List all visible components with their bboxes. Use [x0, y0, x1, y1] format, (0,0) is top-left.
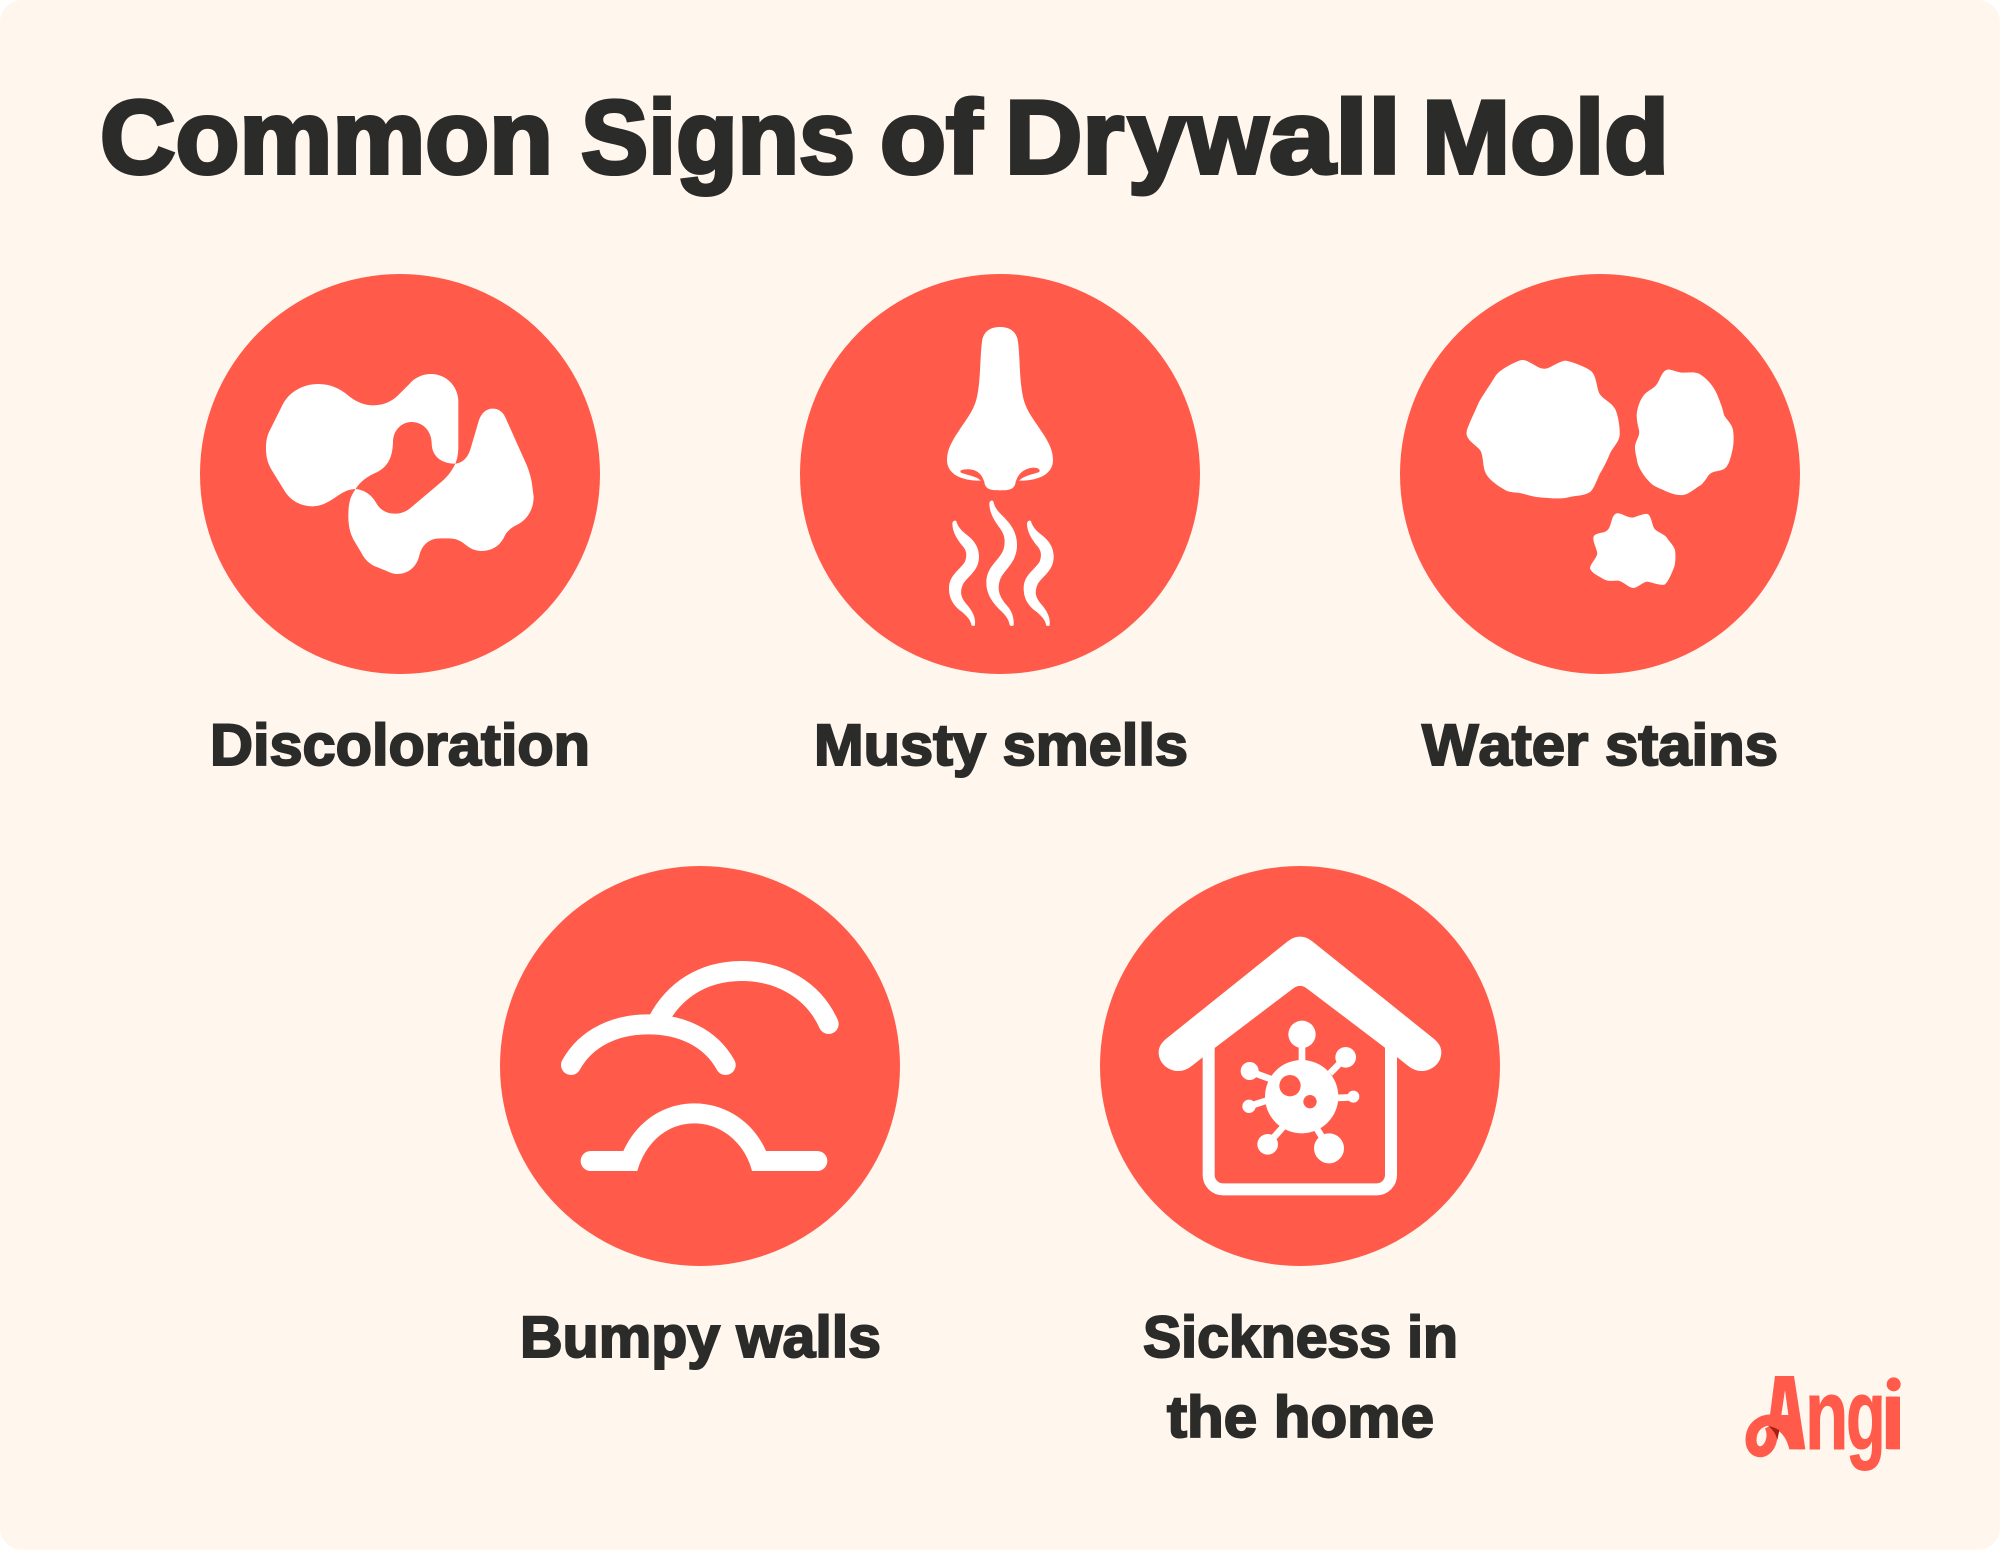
panel: bumpy walls — [500, 866, 900, 1370]
logo: Angi: n — [1805, 1359, 1848, 1471]
logo: Angi: i — [1880, 1358, 1903, 1471]
label: water stains: Water stains — [1422, 713, 1778, 778]
title: Common — [100, 80, 553, 196]
title: Mold — [1422, 80, 1669, 196]
title — [100, 80, 1669, 196]
logo: Angi: g — [1846, 1359, 1886, 1470]
logo: Angi: A — [1770, 1358, 1804, 1471]
panel: musty smells — [800, 274, 1200, 778]
label: sickness in the home — [1143, 1305, 1458, 1450]
title: Signs — [581, 80, 855, 196]
title: Dr — [1005, 80, 1124, 196]
title: y — [1128, 80, 1186, 196]
logo: Angi — [1751, 1358, 1903, 1471]
panel: sickness in the home — [1100, 866, 1500, 1450]
title: of — [880, 80, 982, 196]
label: sickness in the home: Sickness in — [1143, 1305, 1458, 1370]
label: sickness in the home: the home — [1167, 1385, 1434, 1450]
icon: water stain blobs — [1400, 274, 1800, 674]
label: musty smells: Musty smells — [814, 713, 1188, 778]
panel: water stains — [1400, 274, 1800, 778]
title: all — [1269, 80, 1401, 196]
panel: discoloration — [200, 274, 600, 778]
icon: nose with odor waves — [800, 274, 1200, 674]
icon: discoloration blobs — [200, 274, 600, 674]
label: discoloration: Discoloration — [210, 713, 590, 778]
icon: bumpy wall arcs — [500, 866, 900, 1266]
icon: house with virus — [1100, 866, 1500, 1266]
label: bumpy walls: Bumpy walls — [520, 1305, 881, 1370]
title: w — [1187, 80, 1269, 196]
